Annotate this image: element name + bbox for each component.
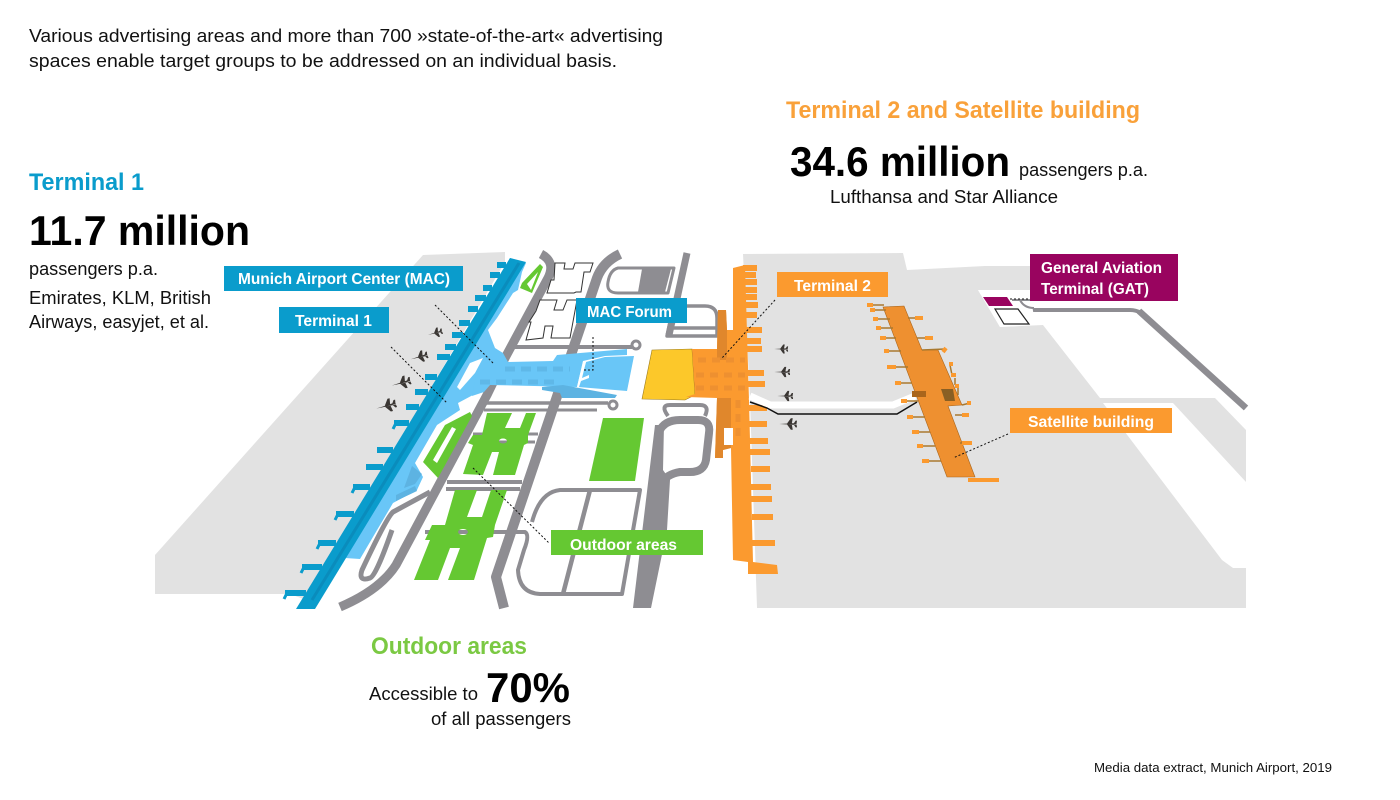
building: Terminal 2 (686, 265, 778, 574)
block: Terminal 1 stats: passengers p.a. (29, 259, 158, 279)
block: Terminal 1 stats (29, 169, 250, 332)
label: Outdoor areas (551, 530, 703, 555)
block: Terminal 1 stats: Airways, easyjet, et al. (29, 312, 209, 332)
intro text: Various advertising areas and more than 700 »state-of-the-art« advertising (29, 26, 663, 46)
block: Terminal 1 stats: Terminal 1 (29, 169, 144, 196)
leader lines (391, 299, 1030, 543)
block: Terminal 2 and Satellite stats: Lufthansa and Star Alliance (830, 187, 1058, 207)
label: Satellite building: Satellite building (1028, 414, 1154, 431)
intro text (29, 26, 663, 71)
label: Terminal 1 (279, 307, 389, 333)
road: main road west (633, 425, 670, 608)
block: Outdoor areas stats: of all passengers (431, 709, 571, 729)
label: Munich Airport Center: Munich Airport Center (MAC) (238, 271, 450, 288)
label: Terminal 1: Terminal 1 (295, 313, 372, 330)
roads and taxiways (340, 253, 1246, 608)
label: General Aviation Terminal: Terminal (GAT) (1041, 281, 1149, 298)
label: General Aviation Terminal (1030, 254, 1178, 301)
label: Munich Airport Center (224, 266, 463, 291)
outdoor area: north forecourt (520, 264, 543, 293)
ground: eastern airfield (743, 253, 1246, 608)
building: MAC car park (638, 269, 671, 292)
block: Terminal 2 and Satellite stats: Terminal 2 and Satellite building (786, 97, 1140, 124)
source credit: Media data extract, Munich Airport, 2019 (1094, 761, 1332, 775)
label: General Aviation Terminal: General Aviation (1041, 260, 1162, 277)
label: Outdoor areas: Outdoor areas (570, 537, 677, 554)
building: General Aviation Terminal (978, 290, 1035, 327)
block: Outdoor areas stats: Accessible to (369, 684, 478, 704)
label: Satellite building (1010, 408, 1172, 433)
block: Terminal 1 stats: 11.7 million (29, 207, 250, 254)
block: Outdoor areas stats (369, 633, 571, 729)
outdoor area: terminal forecourt (423, 412, 472, 478)
label: Terminal 2: Terminal 2 (794, 278, 871, 295)
block: Terminal 2 and Satellite stats: passengers p.a. (1019, 160, 1148, 180)
block: Terminal 2 and Satellite stats: 34.6 million (790, 138, 1010, 185)
label: MAC Forum (576, 298, 687, 323)
airport map (155, 252, 1246, 609)
aircraft (375, 326, 797, 430)
outdoor area: block south (414, 490, 507, 580)
block: Outdoor areas stats: 70% (486, 664, 570, 711)
building: MAC hall north (547, 263, 593, 293)
building: Satellite (867, 305, 999, 482)
building: MAC hall south (526, 300, 577, 340)
building: Terminal 2 check-in yellow (642, 349, 695, 400)
building: Terminal 1 concourse and MAC (345, 258, 634, 559)
link line to satellite (750, 396, 917, 414)
block: Outdoor areas stats: Outdoor areas (371, 633, 527, 660)
block: Terminal 2 and Satellite stats (786, 97, 1148, 207)
label: MAC Forum: MAC Forum (587, 304, 672, 321)
ground: western airfield (155, 252, 505, 600)
label: Terminal 2 (777, 272, 888, 297)
block: Terminal 1 stats: Emirates, KLM, British (29, 288, 211, 308)
intro text: spaces enable target groups to be addressed on an individual basis. (29, 51, 617, 71)
building: Terminal 1 pier (284, 258, 526, 609)
outdoor area: central rectangle (589, 418, 644, 481)
outdoor area: block north (463, 413, 536, 475)
